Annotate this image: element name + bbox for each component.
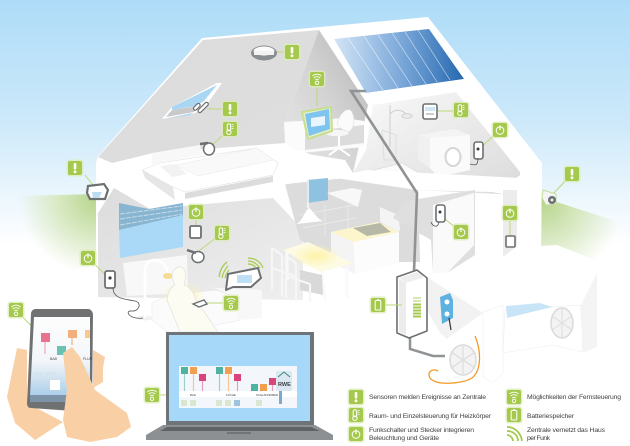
kitchen island [331, 222, 399, 274]
remote on lap [193, 300, 207, 307]
exterior camera right [542, 190, 556, 205]
upper floor slab [112, 150, 520, 208]
laptop app panel: KÜCHE [226, 393, 236, 397]
kitchen window [307, 178, 328, 203]
utility room [393, 190, 475, 273]
cable to inverter [410, 338, 445, 356]
ground floor back wall [98, 188, 303, 300]
wifi badge laptop [144, 386, 160, 404]
legend item: switches: Beleuchtung und Geräte [369, 435, 439, 442]
charging cable [429, 336, 480, 383]
kitchen plug [431, 205, 445, 226]
shower [382, 105, 412, 160]
plug washing machine [470, 142, 483, 165]
bed [142, 145, 278, 200]
power badge kitchen [452, 224, 470, 240]
alert badge: smoke detector [284, 44, 300, 60]
hand back [7, 348, 63, 440]
carport posts [483, 273, 597, 383]
callout line set [16, 52, 572, 395]
pipe from solar panel [351, 91, 417, 272]
phone screen bars [30, 330, 93, 402]
alert badge: right exterior [564, 166, 580, 182]
gable wall [285, 30, 368, 173]
wall switch carport [506, 236, 515, 247]
smartphone in hand [7, 309, 131, 442]
power badge washing machine [492, 122, 508, 138]
phone screen bars: BAD [50, 357, 58, 361]
rear wheel [551, 308, 573, 338]
dining chairs [272, 248, 310, 302]
meadow left [20, 194, 98, 275]
solar panel [334, 29, 464, 105]
laptop app panel: RWE [278, 382, 291, 388]
floor lamp [137, 260, 173, 320]
wallbox [440, 293, 453, 330]
legend item: radio network: per Funk [527, 435, 551, 442]
legend item: battery: Batteriespeicher [527, 413, 575, 420]
alert badge: window [222, 100, 238, 118]
side wall rear [503, 163, 542, 257]
car rear body [503, 305, 583, 353]
legend item: radio network [507, 427, 606, 442]
carport roof [427, 245, 612, 305]
wifi tablet upstairs [302, 107, 332, 139]
shower tray [366, 163, 426, 185]
attic sloped wall [98, 30, 319, 163]
seated person [167, 267, 218, 332]
kitchen right unit [380, 207, 400, 232]
living room window [119, 203, 183, 258]
pendant lamp [296, 180, 323, 224]
phone body [27, 309, 93, 412]
house [96, 17, 612, 385]
kitchen back wall [285, 176, 420, 274]
radiator thermostat living room [187, 250, 204, 262]
sofa [152, 282, 262, 334]
legend item: remote: Möglichkeiten der Fernsteuerung [527, 394, 621, 401]
garage wall [427, 277, 483, 370]
wall switch living room [190, 226, 201, 238]
laptop screen frame [166, 332, 314, 425]
house white shell [96, 17, 612, 385]
phone screen [30, 317, 90, 397]
car front fender [435, 313, 492, 382]
legend item: alert: Sensoren melden Ereignisse an Zentrale [369, 394, 486, 401]
legend item: heating: Raum- und Einzelsteuerung für Heizkörper [369, 413, 492, 420]
sky background [0, 0, 630, 245]
bathroom thermostat [423, 104, 437, 119]
legend item: switches: Funkschalter und Stecker integrieren [369, 427, 474, 434]
power badge floor lamp [80, 250, 96, 266]
desk [284, 118, 364, 153]
thermo badge upstairs [222, 120, 238, 138]
dining table [283, 242, 353, 300]
exterior motion detector left [87, 184, 108, 199]
cooker hood [327, 188, 362, 207]
thermo badge bathroom [452, 102, 470, 118]
laptop [146, 332, 333, 440]
legend item: battery [506, 406, 575, 424]
wifi badge tablet [308, 70, 326, 88]
power badge carport [502, 204, 518, 222]
alert badge: left exterior [66, 160, 84, 176]
central unit with radio waves [219, 258, 263, 290]
thermo badge living room [214, 224, 230, 242]
laptop app panel: SCHLAFZIMMER [256, 393, 278, 397]
car [435, 303, 583, 382]
legend item: alert [348, 388, 486, 406]
battery storage [397, 270, 427, 338]
legend item: remote [506, 388, 621, 406]
legend item: heating [348, 406, 492, 424]
laptop display [169, 335, 310, 421]
bathroom [353, 92, 520, 195]
index finger [63, 347, 131, 442]
fingers [93, 350, 105, 388]
washing machine [418, 129, 470, 177]
window sensor [193, 102, 209, 113]
laptop app panel: BAD [190, 393, 196, 397]
radiator thermostat upstairs [200, 143, 214, 155]
smoke detector [251, 46, 277, 60]
laptop app panel [179, 366, 297, 408]
office chair [325, 110, 354, 156]
phone screen bars: FLUR [83, 357, 93, 361]
left exterior wall [96, 163, 113, 296]
kitchen tiles [300, 204, 355, 235]
laptop keyboard base [146, 425, 333, 440]
roof window [162, 83, 222, 119]
legend [348, 388, 621, 442]
legend item: radio network: Zentrale vernetzt das Haus [527, 427, 606, 434]
battery badge [370, 296, 386, 314]
car windows [480, 303, 552, 327]
wifi badge remote [222, 294, 240, 312]
floor lamp plug [105, 271, 143, 318]
power badge living room [188, 204, 204, 220]
legend item: switches [348, 426, 474, 442]
meadow right [537, 197, 625, 282]
front wheel [450, 345, 476, 375]
low wall behind sofa [123, 255, 188, 296]
wifi badge phone [8, 302, 24, 318]
